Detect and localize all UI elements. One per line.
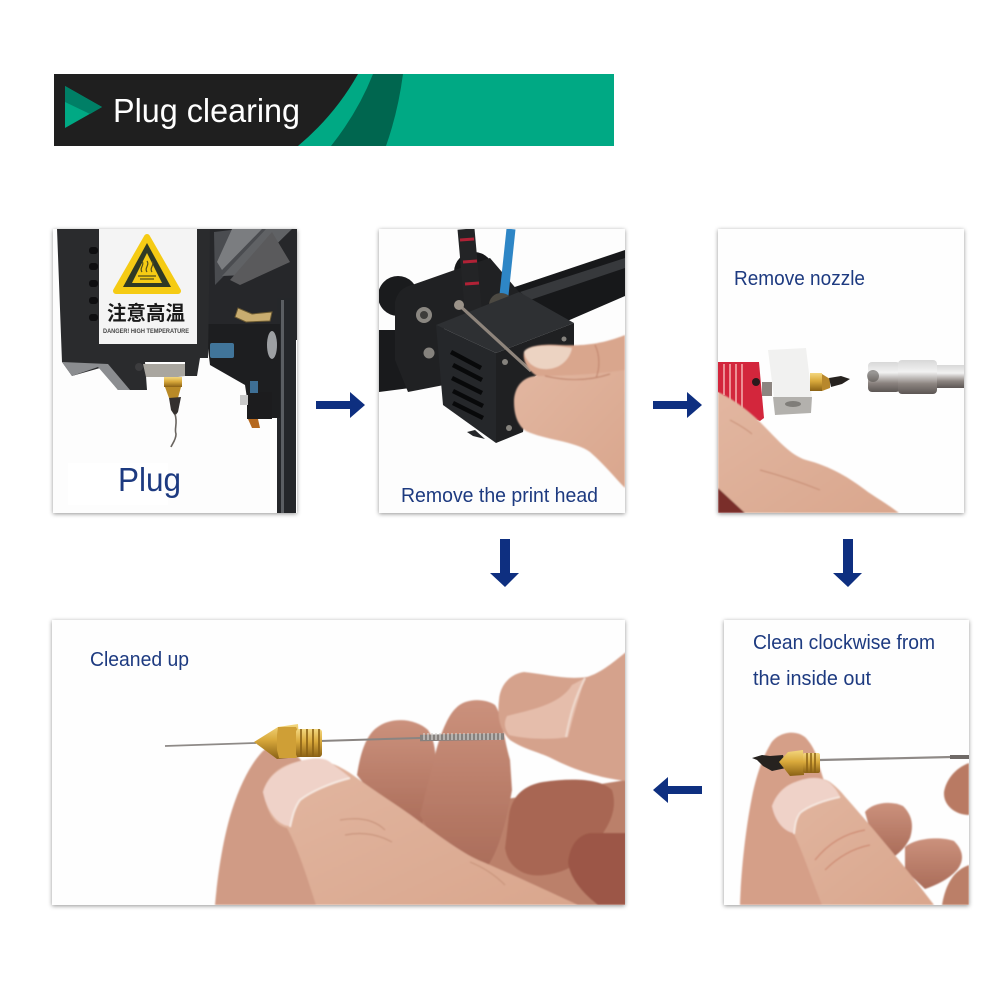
little finger — [942, 865, 969, 905]
arrow: panel 2 to panel 3 — [653, 392, 702, 418]
upper thumb — [498, 652, 626, 781]
panel: remove the print head — [378, 229, 625, 513]
thumb nail — [263, 758, 350, 826]
thumb nail — [772, 778, 840, 833]
nozzle with plug — [164, 377, 182, 447]
arrow: panel 5 to panel 4 — [653, 777, 702, 803]
brass nozzle with debris — [752, 750, 820, 776]
needle — [820, 755, 969, 760]
arrow: panel 2 down to panel 4 — [490, 539, 519, 587]
finger holding nozzle — [740, 733, 830, 905]
caption: plug: Plug — [118, 461, 181, 498]
panel: remove nozzle — [718, 229, 964, 513]
arrow: panel 1 to panel 2 — [316, 392, 365, 418]
frame and rails upper right — [205, 229, 297, 340]
mounting plate — [395, 258, 519, 392]
fan and switch — [205, 324, 280, 418]
supporting finger — [214, 749, 317, 905]
caption: clean clockwise from the inside out: Clean clockwise from — [753, 632, 935, 654]
rail — [514, 250, 625, 320]
wheels — [379, 276, 414, 316]
brass clip — [235, 308, 272, 322]
warning label: 注意高温 — [107, 301, 185, 325]
hand — [514, 335, 625, 488]
thumb — [772, 778, 934, 905]
brass nozzle — [254, 724, 322, 759]
hex key — [459, 305, 531, 371]
nozzle — [810, 373, 850, 391]
caption box — [68, 463, 168, 505]
panel: cleaned up — [52, 620, 626, 905]
bowden tube and cable — [504, 229, 511, 295]
vent slots — [451, 352, 483, 418]
caption: remove the print head: Remove the print head — [401, 485, 598, 507]
ring finger — [905, 838, 962, 889]
front thumb — [263, 760, 578, 905]
middle finger — [865, 803, 912, 856]
socket wrench — [867, 360, 964, 394]
dark curled fingers — [505, 780, 614, 876]
heater block — [143, 364, 185, 377]
caption: remove nozzle: Remove nozzle — [734, 268, 865, 290]
title banner — [54, 74, 614, 146]
black print head body — [57, 229, 210, 390]
needle — [165, 733, 504, 746]
print head cover — [436, 292, 574, 353]
heat sink — [718, 362, 764, 421]
palm behind fingers — [400, 780, 626, 905]
panel: plug on the printer — [53, 229, 297, 513]
arrow: panel 3 down to panel 5 — [833, 539, 862, 587]
panel: clean clockwise — [724, 620, 969, 905]
caption: cleaned up: Cleaned up — [90, 649, 189, 671]
hand — [718, 392, 899, 513]
warning label — [99, 229, 197, 344]
caption: clean clockwise from the inside out: the inside out — [753, 668, 871, 690]
heater block — [768, 348, 812, 398]
ring finger — [420, 700, 512, 870]
vertical rail — [277, 340, 296, 513]
icon: play triangle — [65, 86, 102, 128]
caption: clean clockwise from the inside out — [753, 632, 935, 690]
middle finger — [357, 720, 436, 830]
title text: Plug clearing — [113, 92, 300, 129]
right hand finger — [944, 763, 969, 815]
warning label: DANGER! HIGH TEMPERATURE — [103, 329, 189, 335]
